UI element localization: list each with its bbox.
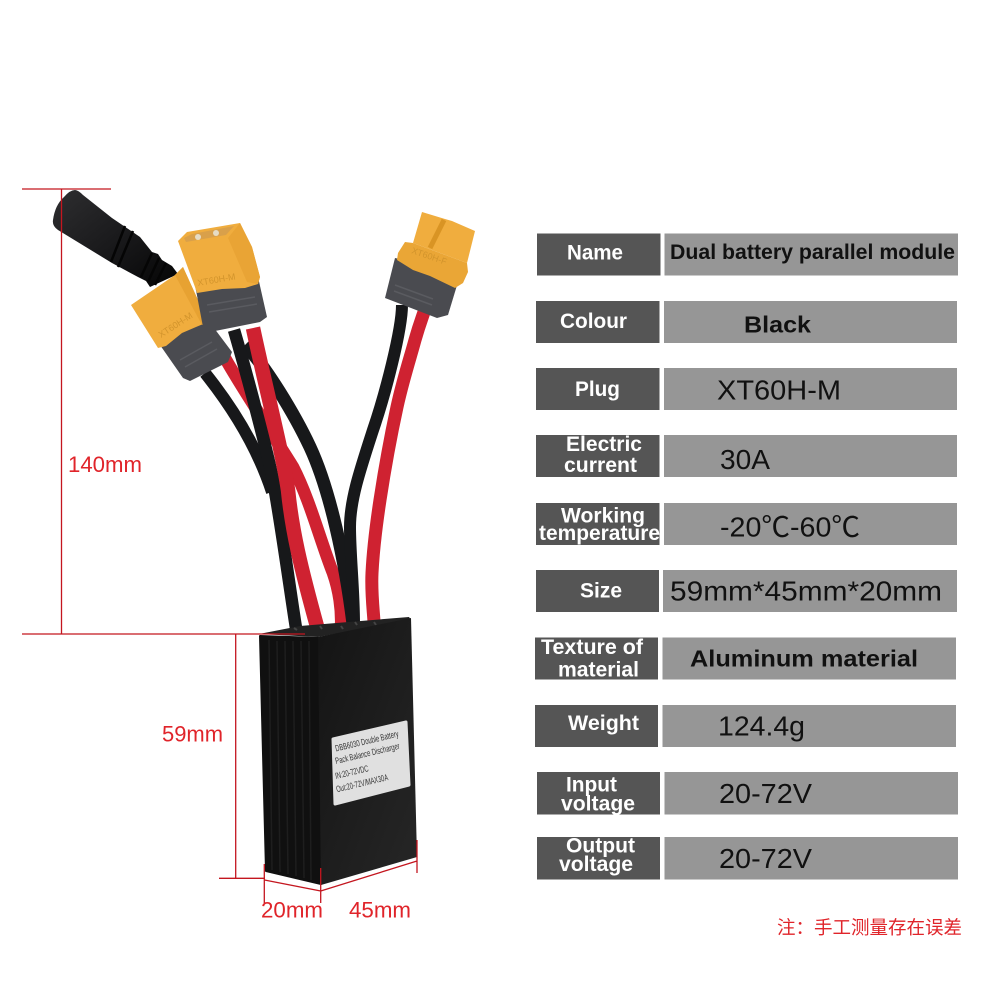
row: Weight: Weight [568, 712, 639, 735]
row: Output voltage [537, 834, 958, 880]
row: Weight: 124.4g [718, 711, 805, 742]
row: Electric current: 30A [720, 444, 770, 475]
front face [318, 618, 417, 885]
dimension: 45mm width: 45mm [349, 898, 411, 922]
dimension: 59mm height: 59mm [162, 722, 223, 746]
row: Size: Size [580, 580, 622, 603]
product label [333, 722, 409, 804]
dimension: 140mm height: 140mm [68, 452, 142, 477]
row: Input voltage: Input [566, 774, 617, 797]
footnote: 注：手工测量存在误差 [777, 917, 962, 938]
dimension: 140mm height [22, 189, 305, 634]
icon: XT60 connector upper [178, 223, 267, 332]
connector marking: XT60H-F [410, 245, 449, 267]
row: Input voltage [537, 772, 958, 816]
product label: Out:20-72V/MAX30A [335, 772, 389, 794]
product label: DBB6030 Double Battery [334, 729, 400, 753]
dimension: 20mm depth: 20mm [261, 898, 323, 922]
dimension: 20mm depth [261, 864, 323, 922]
row: Name [537, 234, 958, 276]
ribbed side face [260, 636, 321, 884]
row: Size: 59mm*45mm*20mm [670, 576, 942, 607]
row: Output voltage: Output [566, 834, 635, 857]
row: Output voltage: 20-72V [719, 843, 812, 874]
cables [205, 305, 424, 630]
row: Working temperature: temperature [539, 522, 660, 545]
product label: Pack Balance Discharger [334, 741, 401, 766]
row: Texture of material: Aluminum material [690, 646, 918, 672]
row: Name: Name [567, 242, 623, 264]
row: Working temperature: -20℃-60℃ [720, 512, 860, 543]
row: Weight [535, 705, 956, 747]
connector marking: XT60H-M [157, 310, 194, 340]
spec table [535, 234, 958, 880]
dimension: 59mm height [162, 634, 265, 878]
row: Size [536, 570, 957, 612]
row: Input voltage: voltage [561, 793, 635, 816]
module body [259, 617, 417, 885]
dimension: 45mm width [321, 840, 417, 922]
row: Electric current: Electric [566, 433, 642, 456]
icon: DC barrel jack [53, 190, 178, 287]
row: Name: Dual battery parallel module [670, 241, 955, 264]
connector marking: XT60H-M [197, 271, 236, 288]
row: Plug [536, 368, 957, 410]
row: Electric current [536, 433, 957, 477]
row: Colour [536, 301, 957, 343]
row: Output voltage: voltage [559, 853, 633, 876]
row: Working temperature: Working [561, 505, 645, 528]
row: Colour: Colour [560, 310, 627, 333]
row: Working temperature [536, 503, 957, 545]
top face [259, 617, 411, 637]
row: Plug: XT60H-M [717, 374, 841, 405]
row: Texture of material: Texture of [541, 636, 644, 659]
row: Electric current: current [564, 454, 637, 477]
row: Texture of material: material [558, 659, 639, 682]
row: Plug: Plug [575, 378, 620, 401]
product label: IN:20-72VDC [334, 763, 370, 781]
icon: XT60 connector right [385, 212, 475, 318]
row: Input voltage: 20-72V [719, 778, 812, 809]
icon: XT60 connector lower left [131, 267, 232, 381]
row: Colour: Black [744, 312, 811, 338]
row: Texture of material [535, 636, 956, 682]
product photo: battery module with cables [53, 190, 475, 885]
